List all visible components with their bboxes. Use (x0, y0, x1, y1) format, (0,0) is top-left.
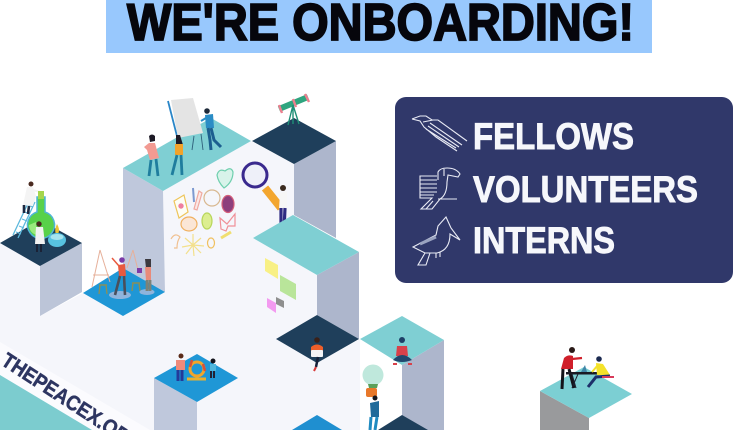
doodles on the wall (171, 169, 235, 256)
icon: ring doodle (208, 238, 214, 248)
icon: flower in frame (178, 203, 184, 209)
block: bottom dark diamond (378, 415, 428, 430)
sticky note: pink (267, 298, 276, 313)
icon: bow doodle (220, 214, 235, 231)
icon: scientist in lab coat (35, 221, 45, 252)
block: easel painting floor (83, 250, 165, 316)
block: telescope (252, 94, 336, 238)
figure: man holding lightbulb (362, 364, 384, 430)
figure: woman in pink (144, 134, 159, 176)
icon: easels (92, 250, 138, 287)
figure: woman painting (137, 259, 154, 295)
figure: painter (109, 257, 131, 299)
sticky note: yellow (265, 258, 278, 279)
icon: volunteers puffin (420, 168, 460, 209)
figure: man with magnifying glass (243, 163, 287, 231)
icon: toy blocks (187, 360, 206, 379)
icon: sweet doodle (221, 232, 231, 238)
icon: striped balloon doodle (202, 213, 212, 229)
icon: telescope (279, 94, 309, 125)
white face under lightbulb block (360, 339, 402, 430)
block: meeting table (540, 347, 632, 430)
icon: magnifying glass (243, 163, 281, 208)
block: meditating woman (360, 316, 444, 430)
block: toy building floor (154, 354, 238, 430)
figure: man presenting (201, 108, 221, 150)
isometric floor surface (0, 141, 360, 430)
icon: table with laptop (566, 365, 602, 388)
icon: heart doodle (217, 169, 233, 188)
icon: pencil doodle (194, 191, 202, 210)
block: sticky notes tower (253, 215, 359, 339)
icon: picture frame doodle (174, 195, 188, 218)
icon: flipchart (168, 98, 203, 150)
figure: seated man in yellow (588, 356, 614, 387)
icon: ladder and scientist (13, 182, 40, 238)
label: volunteers: VOLUNTEERS (473, 169, 698, 210)
label: fellows: FELLOWS (473, 116, 634, 157)
sticky note: green (280, 275, 296, 300)
icon: sun doodle (182, 234, 204, 256)
icon: brush doodle (193, 188, 194, 202)
icon: palette doodle (181, 217, 197, 231)
figure: woman in yellow (172, 135, 183, 175)
icon: smiling face doodle (204, 190, 220, 206)
sticky note: grey (276, 297, 284, 308)
icon: interns woodpecker (413, 217, 460, 265)
icon: dish with flame (48, 224, 66, 247)
label: interns: INTERNS (473, 220, 615, 261)
icon: stools (99, 283, 140, 294)
figure: person on laptop (311, 337, 323, 371)
panel: roles (395, 97, 733, 283)
icon: mushroom doodle (171, 235, 180, 248)
block: science lab (0, 182, 82, 316)
block: bottom blue diamond (292, 415, 342, 430)
icon: green flask (27, 191, 54, 238)
figure: woman sitting cross-legged (393, 337, 412, 364)
figure: child (210, 358, 216, 378)
icon: lightbulb (362, 364, 384, 397)
block: laptop diamond (276, 315, 359, 371)
figure: adult with toys (176, 354, 185, 381)
icon: ladybird doodle (222, 196, 234, 212)
figure: standing man in red (561, 347, 582, 389)
icon: fellows bird (412, 116, 467, 151)
block: workshop tower (123, 118, 251, 292)
